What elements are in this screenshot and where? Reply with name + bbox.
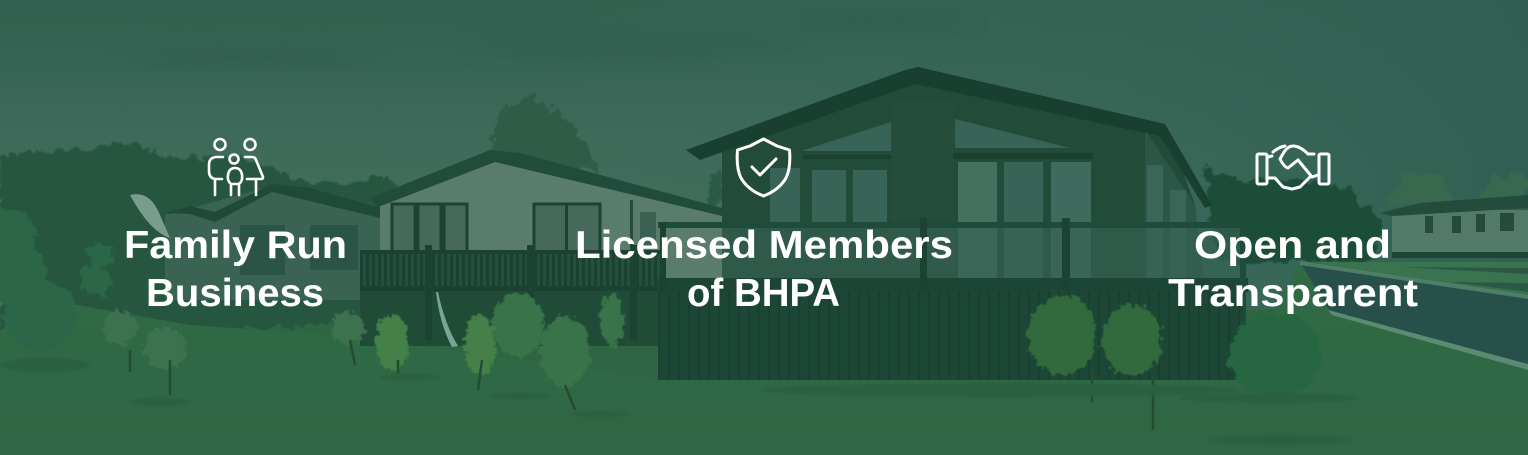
background: shrubs <box>0 209 1321 397</box>
background: main lodge <box>686 67 1212 292</box>
icon: family <box>209 139 263 195</box>
heading: family run business <box>124 224 347 315</box>
background: middle lodge <box>370 150 722 290</box>
background: middle lodge deck <box>360 245 660 347</box>
glazing on main lodge <box>770 119 1186 292</box>
heading: family run business: Family Run <box>124 224 347 267</box>
background: far left lodge <box>130 184 380 300</box>
heading: open and transparent: Transparent <box>1168 272 1418 315</box>
icon: handshake <box>1257 146 1329 189</box>
background: lawn <box>0 262 1528 455</box>
heading: licensed members of BHPA: of BHPA <box>687 272 840 315</box>
background: tree line <box>0 96 1528 345</box>
background: sky <box>0 0 1528 310</box>
heading: family run business: Business <box>146 272 324 315</box>
heading: licensed members of BHPA: Licensed Members <box>575 224 953 267</box>
panel: family run business <box>124 139 347 315</box>
background: shrub stems and shadows <box>0 340 1360 445</box>
panel: licensed members of BHPA <box>575 139 953 315</box>
heading: open and transparent <box>1168 224 1418 315</box>
heading: open and transparent: Open and <box>1194 224 1391 267</box>
background: driveway <box>1300 261 1528 370</box>
heading: licensed members of BHPA <box>575 224 953 315</box>
background: main lodge deck <box>658 215 1248 380</box>
panel: open and transparent <box>1168 146 1418 315</box>
icon: shield with check <box>737 139 790 196</box>
background: far right lodge <box>1380 195 1528 258</box>
